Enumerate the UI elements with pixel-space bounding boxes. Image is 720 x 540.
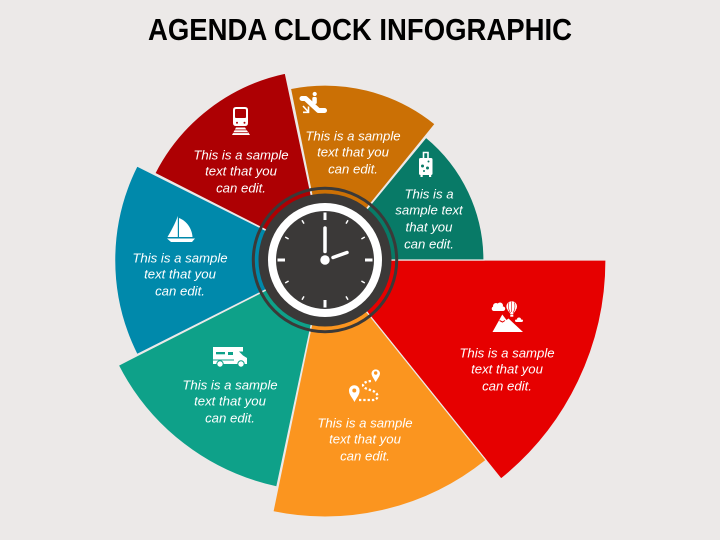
panel: orange sector — [273, 260, 486, 517]
panel: red sector — [325, 260, 606, 479]
text: dark red sector: text that you — [205, 164, 278, 179]
title: AGENDA CLOCK INFOGRAPHIC — [148, 13, 572, 47]
icon: camper van — [213, 347, 247, 367]
text: teal sector: can edit. — [404, 237, 454, 252]
text: teal sector: This is a — [404, 187, 454, 202]
panel: blue sector — [115, 166, 325, 354]
text: brown sector: text that you — [317, 145, 390, 160]
text: teal sector — [395, 187, 464, 252]
text: green sector — [182, 378, 278, 426]
icon: escalator — [302, 92, 324, 112]
icon: train — [232, 107, 250, 135]
text: green sector: This is a sample — [182, 378, 278, 393]
icon: sailboat — [167, 216, 195, 242]
text: blue sector — [132, 251, 228, 299]
text: blue sector: text that you — [144, 267, 217, 282]
text: dark red sector: This is a sample — [193, 148, 289, 163]
text: teal sector: that you — [406, 220, 453, 235]
text: teal sector: sample text — [395, 203, 464, 218]
text: blue sector: This is a sample — [132, 251, 228, 266]
icon: suitcase — [419, 152, 432, 177]
panel: brown sector — [290, 85, 435, 260]
text: orange sector: This is a sample — [317, 416, 413, 431]
text: dark red sector — [193, 148, 289, 196]
text: dark red sector: can edit. — [216, 181, 266, 196]
text: orange sector: can edit. — [340, 449, 390, 464]
panel: dark red sector — [155, 73, 325, 260]
text: red sector — [459, 346, 555, 394]
panel: teal sector — [325, 137, 484, 260]
text: green sector: text that you — [194, 394, 267, 409]
text: brown sector: can edit. — [328, 162, 378, 177]
icon: route with pins — [349, 369, 380, 402]
text: orange sector: text that you — [329, 432, 402, 447]
text: red sector: can edit. — [482, 379, 532, 394]
text: red sector: This is a sample — [459, 346, 555, 361]
text: red sector: text that you — [471, 362, 544, 377]
text: green sector: can edit. — [205, 411, 255, 426]
clock hands — [320, 228, 347, 265]
icon: mountain and balloon — [492, 301, 523, 332]
panel: green sector — [118, 260, 325, 487]
text: orange sector — [317, 416, 413, 464]
text: blue sector: can edit. — [155, 284, 205, 299]
text: brown sector: This is a sample — [305, 129, 401, 144]
clock — [253, 188, 397, 332]
text: brown sector — [305, 129, 401, 177]
